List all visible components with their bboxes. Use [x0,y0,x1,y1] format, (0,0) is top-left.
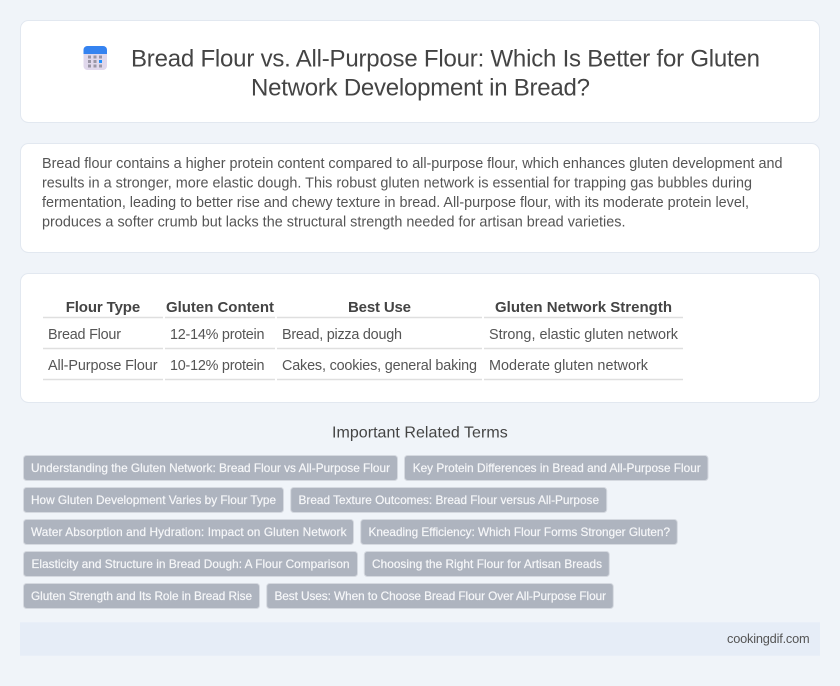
text block: summary [42,156,782,230]
table row: bread flour: Bread Flour [48,327,121,343]
chip: Kneading Efficiency: Which Flour Forms Stronger Gluten? [368,525,670,539]
table header row: Gluten Content [166,299,274,316]
table row: bread flour: 12-14% protein [170,327,264,343]
table row: bread flour: Strong, elastic gluten network [489,327,679,343]
chip [24,520,354,544]
footer [20,622,820,656]
table row: all-purpose flour: Moderate gluten network [489,358,649,374]
chip: Best Uses: When to Choose Bread Flour Over All-Purpose Flour [274,589,606,603]
title: Bread Flour vs. All-Purpose Flour: Which Is Better for Gluten [131,46,760,72]
heading: related terms: Important Related Terms [332,425,508,442]
chip [24,456,398,480]
chip [291,488,607,512]
table row: all-purpose flour: Cakes, cookies, general baking [282,358,477,374]
panel: summary paragraph [20,144,820,252]
table row: bread flour: Bread, pizza dough [282,327,402,343]
text block: summary: fermentation, leading to better rise and chewy texture in bread. All-purpose flour, with its moderate protein level, [42,195,749,211]
chip: Bread Texture Outcomes: Bread Flour versus All-Purpose [298,493,599,507]
chip [267,584,613,608]
table row: all-purpose flour: 10-12% protein [170,358,264,374]
text block: summary: produces a softer crumb but lacks the structural strength needed for artisan bread varieties. [42,214,626,230]
chip [364,552,609,576]
chip [404,456,708,480]
panel: comparison table [20,274,820,402]
chip [24,584,260,608]
title [131,46,760,102]
title: Network Development in Bread? [251,74,590,102]
chip [361,520,677,544]
text block: summary: Bread flour contains a higher protein content compared to all-purpose flour, which enhances gluten development and [42,156,782,172]
chip: Key Protein Differences in Bread and All-Purpose Flour [413,461,701,475]
panel: header [20,20,820,122]
table header row: Flour Type [66,299,140,316]
table row: all-purpose flour: All-Purpose Flour [48,358,158,374]
footer: cookingdif.com [727,631,810,646]
chip [24,488,284,512]
chip: Choosing the Right Flour for Artisan Breads [372,557,602,571]
text block: summary: results in a stronger, more elastic dough. This robust gluten network is essential for trapping gas bubbles during [42,176,752,192]
chip: How Gluten Development Varies by Flour Type [31,493,276,507]
chip: Elasticity and Structure in Bread Dough: A Flour Comparison [32,557,350,571]
chip: Gluten Strength and Its Role in Bread Rise [31,589,252,603]
related term chips [24,456,708,608]
table header row: Best Use [348,299,411,316]
table header row [66,299,672,316]
table header row: Gluten Network Strength [495,299,672,316]
chip: Water Absorption and Hydration: Impact on Gluten Network [31,525,347,539]
icon: calendar [84,46,107,70]
chip [24,552,358,576]
table row: all-purpose flour [48,358,649,374]
table row: bread flour [48,327,679,343]
chip: Understanding the Gluten Network: Bread Flour vs All-Purpose Flour [31,461,390,475]
